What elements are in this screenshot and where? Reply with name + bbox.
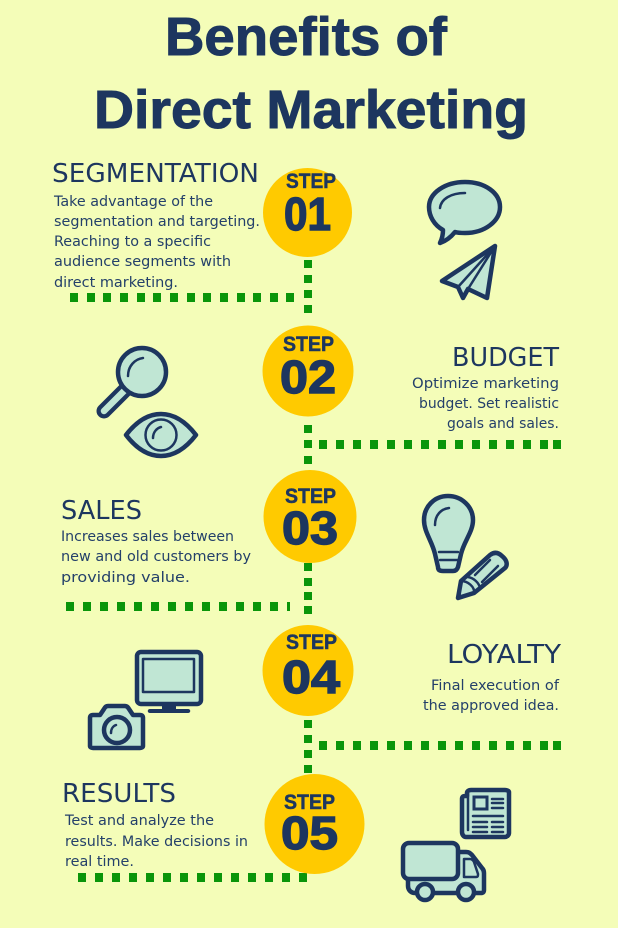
- text block: segmentation: direct marketing.: [54, 275, 178, 291]
- text block: segmentation: Reaching to a specific: [54, 234, 211, 250]
- text block: results: RESULTS: [62, 779, 176, 809]
- step 3 badge: STEP: [285, 485, 336, 508]
- text block: budget: goals and sales.: [447, 416, 559, 432]
- title: Benefits of: [165, 7, 448, 67]
- text block: sales: Increases sales between: [61, 529, 234, 545]
- text block: budget: [412, 343, 559, 432]
- text block: segmentation: Take advantage of the: [53, 194, 213, 210]
- text block: segmentation: [52, 159, 260, 291]
- step 1 badge: 01: [284, 188, 331, 240]
- text block: loyalty: the approved idea.: [423, 698, 559, 714]
- text block: loyalty: Final execution of: [431, 678, 560, 694]
- step 4 badge: [262, 625, 354, 716]
- icon: monitor: [137, 652, 201, 713]
- text block: sales: [61, 496, 251, 586]
- text block: budget: Optimize marketing: [412, 376, 559, 392]
- step 4 badge: 04: [282, 651, 340, 703]
- step 3 badge: [264, 470, 356, 563]
- step 5 badge: STEP: [284, 791, 335, 814]
- icon: camera: [90, 706, 143, 748]
- step 2 badge: 02: [280, 351, 336, 403]
- text block: results: results. Make decisions in: [65, 834, 248, 850]
- text block: loyalty: [423, 640, 561, 714]
- text block: segmentation: audience segments with: [54, 254, 231, 270]
- text block: results: [62, 779, 248, 870]
- icon: newspaper: [462, 790, 509, 837]
- icon: speech bubble: [429, 182, 500, 243]
- step 4 badge: STEP: [286, 631, 337, 654]
- text block: budget: BUDGET: [452, 343, 559, 373]
- title: Direct Marketing: [94, 80, 528, 140]
- title: [94, 7, 528, 140]
- icon: paper plane: [442, 246, 495, 298]
- text block: sales: providing value.: [61, 570, 190, 586]
- text block: segmentation: SEGMENTATION: [52, 159, 259, 189]
- icon: magnifying glass: [104, 348, 166, 411]
- text block: loyalty: LOYALTY: [447, 640, 561, 670]
- step 1 badge: [263, 168, 352, 257]
- icon: light bulb: [424, 496, 473, 571]
- text block: sales: SALES: [61, 496, 142, 526]
- text block: sales: new and old customers by: [61, 549, 251, 565]
- step 2 badge: STEP: [283, 333, 334, 356]
- text block: budget: budget. Set realistic: [419, 396, 559, 412]
- step 5 badge: [264, 774, 364, 874]
- text block: segmentation: segmentation and targeting.: [54, 214, 260, 230]
- step 2 badge: [262, 326, 354, 416]
- dotted timeline connector: [66, 260, 561, 882]
- step 1 badge: STEP: [286, 170, 336, 193]
- step 5 badge: 05: [281, 807, 338, 859]
- icon: delivery truck: [403, 843, 484, 900]
- text block: results: Test and analyze the: [64, 813, 214, 829]
- icon: pencil: [458, 553, 507, 598]
- step 3 badge: 03: [282, 502, 338, 554]
- icon: eye: [126, 414, 196, 456]
- text block: results: real time.: [65, 854, 134, 870]
